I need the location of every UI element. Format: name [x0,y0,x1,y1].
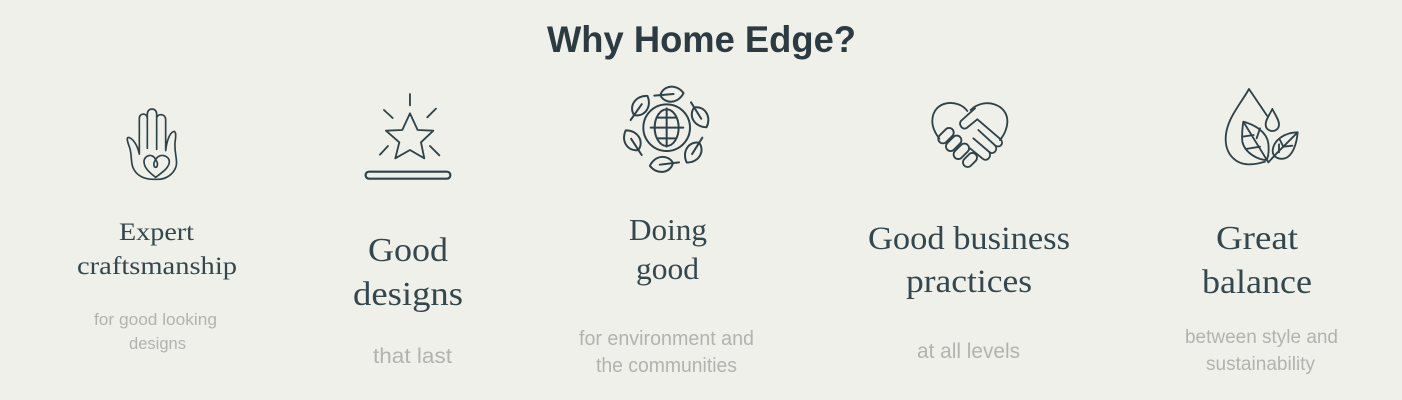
text: for environment and the communities: the communities [596,355,737,377]
panel: great balance [1185,89,1338,375]
text: for good looking designs [94,310,217,353]
heading: expert craftsmanship [77,219,237,280]
heading: good designs: designs [353,276,463,313]
text: between style and sustainability: sustainability [1206,354,1315,375]
text: that last: that last [373,345,452,368]
heading: good business practices [868,221,1070,300]
panel: good business practices [868,103,1070,363]
heading: good business practices: practices [906,264,1032,300]
heading: doing good: good [636,251,700,286]
heading: great balance: balance [1202,264,1312,301]
text: for good looking designs: for good looking [94,310,217,329]
text: between style and sustainability: between style and [1185,327,1338,348]
heading: expert craftsmanship: craftsmanship [77,253,237,280]
heading: great balance [1202,220,1312,301]
panel: good designs [353,94,463,368]
icon: water drops and leaves [1226,89,1298,164]
icon: shining star on platform [366,94,450,179]
heading: doing good: Doing [629,212,707,247]
text: for environment and the communities [579,328,754,377]
heading: doing good [629,212,707,286]
text: at all levels: at all levels [917,340,1020,363]
heading: good designs [353,232,463,313]
text: for environment and the communities: for environment and [579,328,754,350]
heading: good designs: Good [368,232,448,269]
icon: handshake heart [932,103,1007,169]
panel: doing good [579,86,754,377]
heading: expert craftsmanship: Expert [119,219,194,246]
text: between style and sustainability [1185,327,1338,375]
heading: good business practices: Good business [868,221,1070,257]
panel: expert craftsmanship [77,109,237,353]
icon: globe with leaves [619,86,713,173]
icon: hand with heart [127,109,177,179]
heading: great balance: Great [1216,220,1299,257]
title: Why Home Edge? [547,19,856,60]
text: for good looking designs: designs [129,334,186,353]
